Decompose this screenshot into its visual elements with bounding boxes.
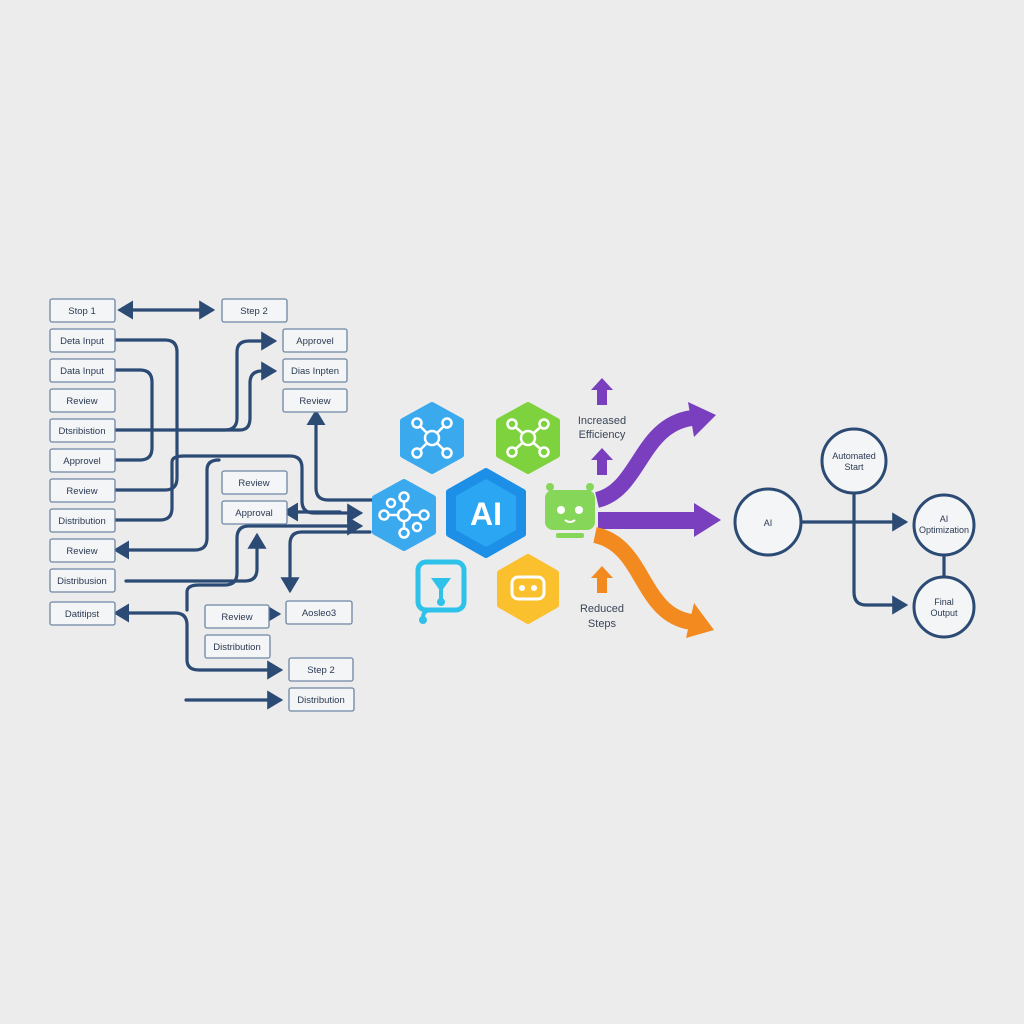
left column boxes: Dtsribistion [58, 426, 106, 437]
callout: increased efficiency: Efficiency [579, 429, 626, 441]
icon: green robot [545, 483, 595, 538]
left column boxes: Deta Input [60, 336, 104, 347]
middle boxes: Aosleo3 [302, 608, 336, 619]
middle boxes: Approval [235, 508, 273, 519]
arrow: purple straight [598, 503, 721, 537]
right flow diagram: Optimization [919, 525, 969, 535]
callout: increased efficiency: Increased [578, 415, 626, 427]
middle boxes [205, 299, 354, 711]
icon: AI central hex: AI [470, 496, 502, 532]
connector lines: process flow [115, 310, 372, 700]
middle boxes: Distribution [297, 695, 345, 706]
right flow diagram: Output [930, 608, 958, 618]
middle boxes: Dias Inpten [291, 366, 339, 377]
right flow diagram: AI [764, 518, 772, 528]
left column boxes: Distribusion [57, 576, 107, 587]
callout: reduced steps: Steps [588, 618, 617, 630]
callout: reduced steps [580, 566, 624, 630]
icon: green network hex [499, 405, 557, 471]
arrow: purple curved up [597, 402, 716, 500]
callout: reduced steps: Reduced [580, 603, 624, 615]
left column boxes: Review [66, 396, 98, 407]
icon: AI central hex [449, 471, 523, 555]
left column boxes [50, 299, 115, 625]
right flow diagram: Automated [832, 451, 876, 461]
right flow diagram: Start [844, 462, 864, 472]
left column boxes: Distribution [58, 516, 106, 527]
left column boxes: Review [66, 546, 98, 557]
middle boxes: Review [221, 612, 253, 623]
left column boxes: Approvel [63, 456, 101, 467]
middle boxes: Review [238, 478, 270, 489]
icon: yellow bot hex [500, 557, 556, 621]
right flow diagram: AI [940, 514, 948, 524]
right flow diagram: Final [934, 597, 954, 607]
middle boxes: Step 2 [307, 665, 335, 676]
left column boxes: Datitipst [65, 609, 100, 620]
icon: left blue network hex [375, 482, 433, 548]
left column boxes: Stop 1 [68, 306, 96, 317]
middle boxes: Approvel [296, 336, 334, 347]
middle boxes: Review [299, 396, 331, 407]
middle boxes: Distribution [213, 642, 261, 653]
arrow: orange curved down [595, 535, 714, 638]
left column boxes: Review [66, 486, 98, 497]
right flow diagram [735, 429, 974, 637]
middle boxes: Step 2 [240, 306, 268, 317]
callout: increased efficiency [578, 378, 626, 475]
left column boxes: Data Input [60, 366, 104, 377]
icon: blue network hex top [403, 405, 461, 471]
icon: cyan robot [418, 562, 464, 624]
